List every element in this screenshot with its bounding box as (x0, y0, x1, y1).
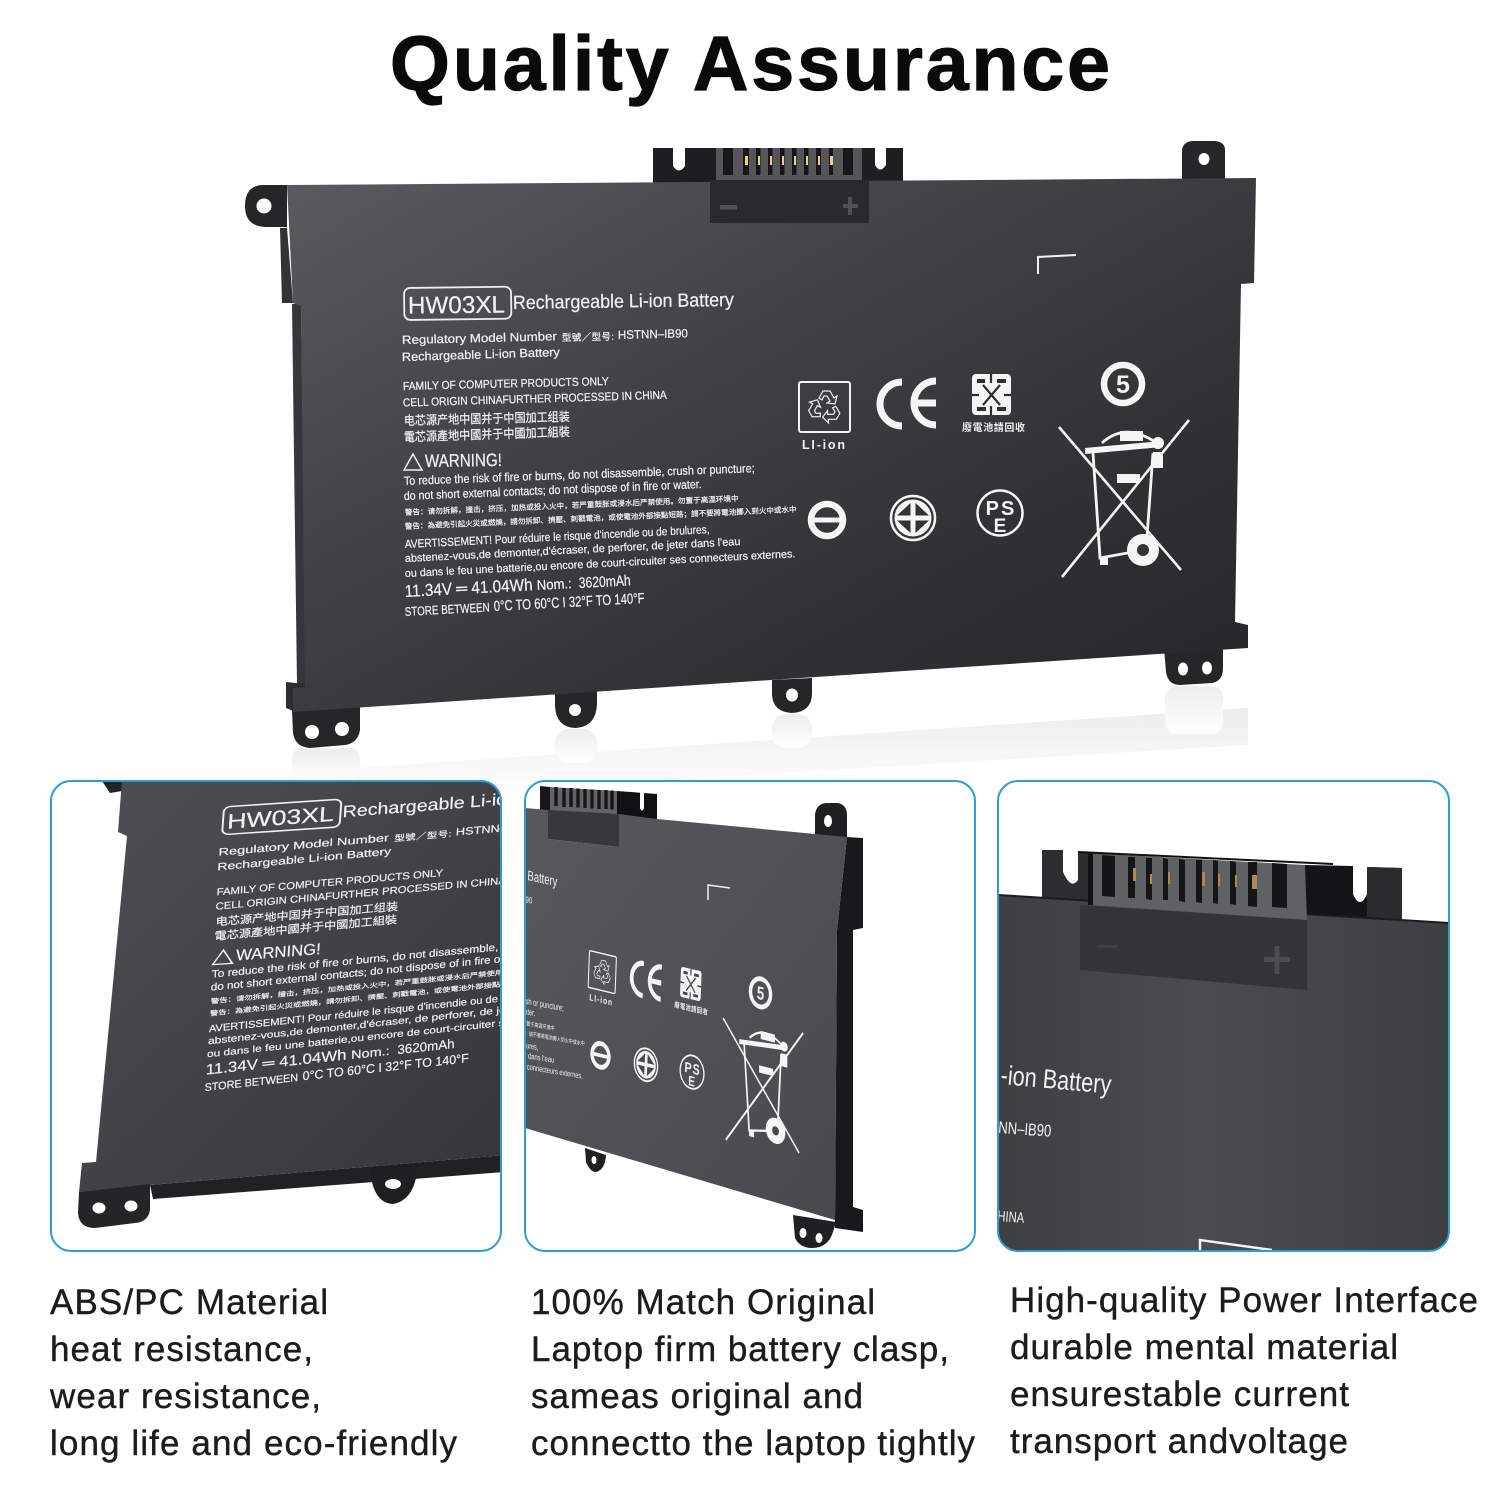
skewed label text: HW03XL (227, 802, 334, 834)
icon: PSE mark: E (994, 516, 1006, 537)
caption: ABS/PC Material: ABS/PC Material (50, 1283, 328, 1322)
skewed label text: 警告：请勿拆解，撞击，挤压，加热或投入火中，若严重鼓胀或浸水后严禁使用。勿置于高温环境中 (211, 960, 578, 1005)
skewed label remnants (526, 870, 584, 1079)
angled battery body (525, 808, 847, 1220)
skewed label text: To reduce the risk of fire or burns, do not disassemble, crush or puncture; (212, 931, 598, 980)
label text block: To reduce the risk of fire or burns, do not disassemble, crush or puncture; (404, 461, 755, 488)
angled connector (540, 786, 657, 819)
skewed label remnants: HSTNN–IB90 (495, 888, 532, 906)
skewed label remnants: Rechargeable Li-ion Battery (440, 848, 558, 890)
label text block: 3620mAh (578, 572, 631, 592)
bracket mark (1198, 1238, 1272, 1250)
magnified label text: HINA (997, 1208, 1025, 1227)
caption: 100% Match Original: Laptop firm battery clasp, (531, 1330, 949, 1369)
skewed certification symbols: 5 (756, 983, 765, 1005)
skewed label text: STORE BETWEEN (205, 1071, 298, 1094)
skewed label text: abstenez-vous,de demonter,d'écraser, de perforer, de jeter dans l'eau (208, 997, 578, 1047)
skewed label text: HSTNN–IB90 (456, 819, 534, 838)
skewed label text: 警告：為避免引起火災或燃燒，請勿拆卸、擠壓、刺戳電池，或使電池外部接點短路；請不要將電池擲入到火中或水中 (210, 965, 641, 1017)
flange tab (78, 1184, 150, 1228)
label text block: 型號／型号: (562, 331, 614, 344)
caption: 100% Match Original: 100% Match Original (531, 1283, 875, 1322)
skewed label text: do not short external contacts; do not dispose of in fire or water. (211, 949, 539, 993)
label text block: abstenez-vous,de demonter,d'écraser, de perforer, de jeter dans l'eau (405, 536, 741, 565)
icon: 5 year circle: 5 (1116, 371, 1130, 399)
skewed label remnants: AVERTISSEMENT! Pour réduire le risque d'incendie ou de brulures, (377, 1015, 538, 1052)
caption: High-quality Power Interface: transport andvoltage (1010, 1422, 1348, 1461)
bracket mark (1038, 255, 1076, 274)
caption: High-quality Power Interface: High-quality Power Interface (1010, 1281, 1478, 1320)
skewed crossed-out bin (723, 1012, 804, 1160)
label text block: STORE BETWEEN (404, 600, 490, 619)
battery body top (998, 895, 1449, 1252)
skewed label text: AVERTISSEMENT! Pour réduire le risque d'incendie ou de brulures, (209, 989, 544, 1035)
magnified label text: -ion Battery (999, 1060, 1113, 1100)
skewed label remnants: To reduce the risk of fire or burns, do not disassemble, crush or puncture; (378, 968, 564, 1013)
skewed label text: Rechargeable Li-ion Battery (217, 845, 391, 873)
skewed label text: 0°C TO 60°C I 32°F TO 140°F (303, 1052, 469, 1084)
magnified label text: NN–IB90 (998, 1118, 1052, 1141)
side rail and tabs (585, 803, 847, 1248)
skewed certification symbols: 廢電池請回收 (674, 999, 708, 1017)
label text block: Nom.: (536, 575, 572, 593)
caption: High-quality Power Interface (1010, 1281, 1478, 1461)
magnified label text (997, 1060, 1113, 1227)
skewed certification symbols (588, 950, 772, 1090)
label text block: Rechargeable Li-ion Battery (402, 345, 560, 364)
label text block: Regulatory Model Number (402, 329, 557, 347)
label text block: CELL ORIGIN CHINAFURTHER PROCESSED IN CHINA (403, 390, 667, 409)
battery body close-up (79, 780, 505, 1192)
skewed label text: ou dans le feu une batterie,ou encore de court-circuiter ses connecteurs externes. (207, 1004, 637, 1060)
skewed label text: Nom.: (351, 1044, 390, 1062)
caption: 100% Match Original: sameas original and (531, 1377, 863, 1416)
skewed label text: 11.34V ═ 41.04Wh (206, 1046, 347, 1078)
label text block: 電芯源產地中國并于中國加工組裝 (404, 424, 570, 444)
skewed label remnants: CELL ORIGIN CHINAFURTHER PROCESSED IN CHINA (380, 911, 519, 948)
label text block: WARNING! (425, 450, 502, 471)
icon: CE mark (880, 381, 936, 426)
polarity label (548, 810, 619, 847)
label text block: do not short external contacts; do not dispose of in fire or water. (404, 477, 702, 503)
label text block: AVERTISSEMENT! Pour réduire le risque d'incendie ou de brulures, (405, 524, 710, 551)
label text block: Rechargeable Li-ion Battery (513, 290, 735, 314)
battery tabs (245, 141, 1225, 748)
skewed label text: CELL ORIGIN CHINAFURTHER PROCESSED IN CHINA (215, 876, 506, 912)
label text block: 电芯源产地中国并于中国加工组装 (404, 409, 570, 428)
power connector (1078, 852, 1333, 990)
skewed label remnants: 0°C TO 60°C I 32°F TO 140°F (422, 1071, 502, 1096)
skewed label text (205, 793, 500, 1091)
label text block: 警告：请勿拆解，撞击，挤压，加热或投入火中，若严重鼓胀或浸水后严禁使用。勿置于高温环境中 (405, 493, 739, 517)
connector block (653, 148, 903, 184)
icon: circle bar mark (808, 504, 846, 536)
label text block (402, 287, 797, 619)
skewed label text: 型號／型号: (394, 829, 452, 843)
skewed label remnants: abstenez-vous,de demonter,d'écraser, de perforer, de jeter dans l'eau (377, 1026, 554, 1065)
skewed certification symbols: PS (684, 1058, 701, 1079)
certification symbols (799, 365, 1189, 577)
battery body (287, 178, 1256, 712)
icon: 5 year circle (1104, 365, 1142, 403)
skewed label remnants: 警告：请勿拆解，撞击，挤压，加热或投入火中，若严重鼓胀或浸水后严禁使用。勿置于高温环境中 (378, 993, 555, 1033)
caption: ABS/PC Material: long life and eco-friendly (50, 1424, 458, 1463)
polarity label (710, 180, 869, 223)
label text block: 11.34V ═ 41.04Wh (404, 575, 533, 601)
caption: High-quality Power Interface: ensurestable current (1010, 1375, 1349, 1414)
panel: power interface close-up (997, 781, 1449, 1254)
label text block: HW03XL (408, 291, 505, 319)
icon: circle cross mark (891, 496, 935, 540)
icon: Li-ion recycling box (799, 382, 850, 452)
skewed label text: 電芯源產地中國并于中國加工組裝 (214, 913, 397, 943)
side tabs (1042, 850, 1402, 926)
skewed label text: 3620mAh (397, 1038, 455, 1058)
skewed label remnants: ou dans le feu une batterie,ou encore de court-circuiter ses connecteurs externes. (376, 1037, 583, 1081)
bracket mark (708, 885, 730, 900)
soft reflection (292, 686, 1248, 802)
icon: PSE mark (978, 490, 1022, 537)
skewed label remnants: do not short external contacts; do not dispose of in fire or water. (378, 979, 535, 1018)
label text block: FAMILY OF COMPUTER PRODUCTS ONLY (403, 376, 609, 393)
caption: 100% Match Original (531, 1283, 976, 1463)
icon: battery recycling mark (962, 374, 1025, 434)
panel: clasp and symbols close-up (524, 780, 976, 1252)
icon: PSE mark: PS (986, 498, 1016, 520)
skewed label text: Regulatory Model Number (218, 831, 389, 858)
icon: battery recycling mark: 廢電池請回收 (962, 421, 1025, 434)
icon: Li-ion recycling box: LI-ion (802, 438, 845, 452)
skewed label remnants: 警告：為避免引起火災或燃燒，請勿拆卸、擠壓、刺戳電池，或使電池外部接點短路；請不要將電池擲入到火中或水中 (377, 1003, 585, 1048)
icon: crossed-out bin (1059, 420, 1189, 577)
caption: 100% Match Original: connectto the laptop tightly (531, 1424, 976, 1463)
label text block: 0°C TO 60°C I 32°F TO 140°F (493, 591, 645, 615)
skewed certification symbols: LI-ion (589, 992, 612, 1008)
skewed label text: Rechargeable Li-ion Battery (342, 784, 587, 821)
panel: label close-up (50, 780, 502, 1252)
label text block: HSTNN–IB90 (618, 326, 688, 342)
skewed label text: FAMILY OF COMPUTER PRODUCTS ONLY (216, 868, 444, 898)
caption: High-quality Power Interface: durable mental material (1010, 1328, 1398, 1367)
caption: ABS/PC Material: wear resistance, (49, 1377, 321, 1416)
skewed label text: 电芯源产地中国并于中国加工组装 (215, 900, 398, 928)
skewed certification symbols: E (688, 1073, 695, 1090)
label text block: 警告：為避免引起火災或燃燒，請勿拆卸、擠壓、刺戳電池，或使電池外部接點短路；請不要將電池擲入到火中或水中 (405, 504, 797, 531)
caption: ABS/PC Material (49, 1283, 458, 1463)
title: Quality Assurance (390, 21, 1110, 107)
label text block: ou dans le feu une batterie,ou encore de court-circuiter ses connecteurs externes. (405, 548, 796, 580)
main battery illustration (245, 141, 1256, 802)
caption: ABS/PC Material: heat resistance, (50, 1330, 313, 1369)
skewed label text: WARNING! (236, 940, 321, 964)
